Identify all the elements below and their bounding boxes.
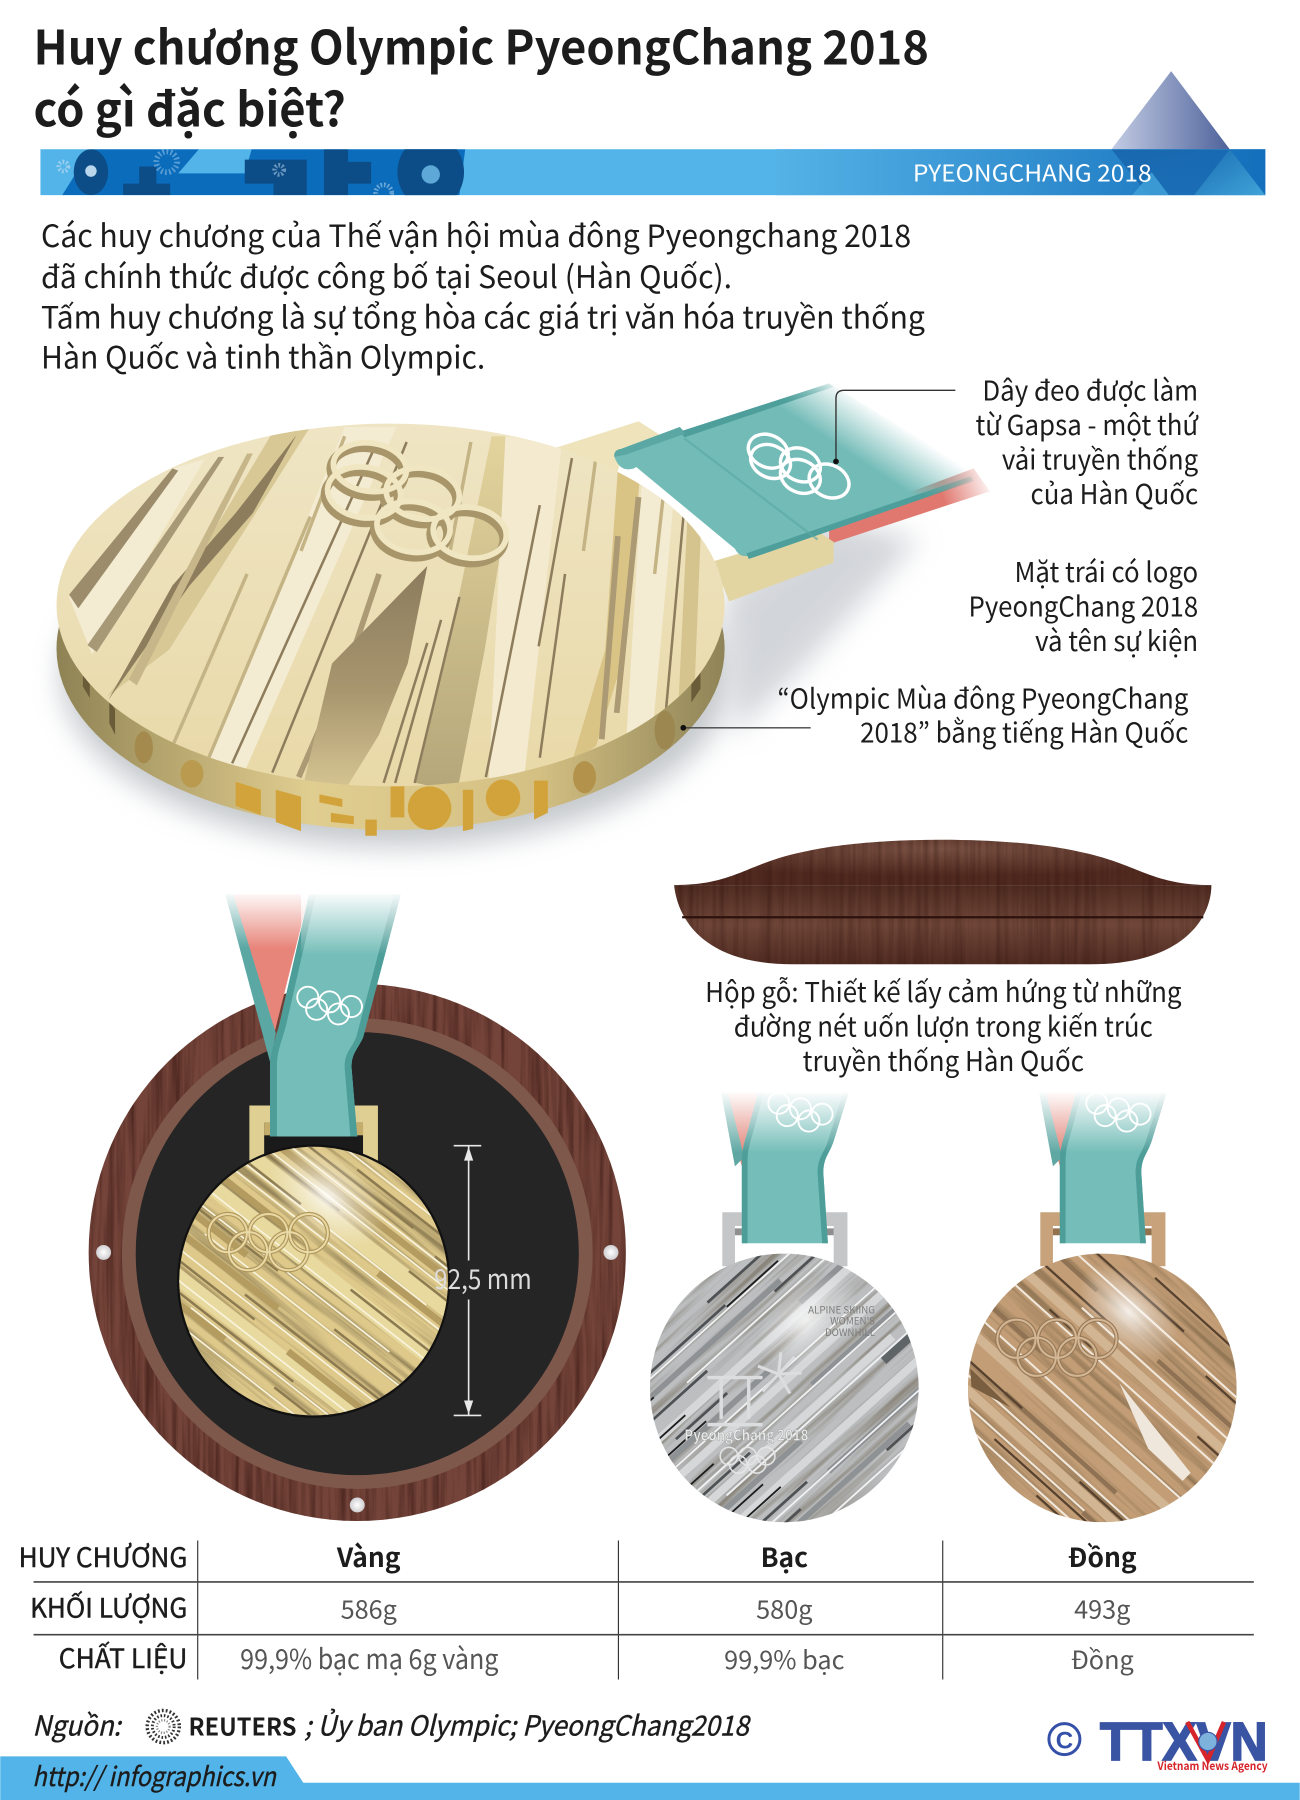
lower loop (713, 530, 834, 602)
callout: obverse: và tên sự kiện (1035, 619, 1198, 659)
wooden box side view (674, 840, 1211, 964)
title (34, 9, 929, 140)
footer bar (0, 1755, 1300, 1800)
row: medal (19, 1536, 1137, 1575)
silver emblem text: WOMEN'S (830, 1314, 875, 1328)
callout: edge lettering: 2018” bằng tiếng Hàn Quốc (860, 711, 1188, 751)
intro text: Tấm huy chương là sự tổng hòa các giá trị văn hóa truyền thống (41, 292, 925, 337)
caption: wooden box: truyền thống Hàn Quốc (803, 1039, 1084, 1079)
row: material (59, 1637, 1134, 1677)
row: weight: 493g (1074, 1591, 1130, 1627)
bronze medal (968, 1094, 1237, 1522)
back ribbon (225, 894, 309, 1050)
silver hanger (722, 1212, 847, 1266)
embossed rings (322, 438, 510, 567)
bronze rings (997, 1320, 1117, 1376)
logo: TTXVN: Vietnam News Agency (1157, 1758, 1268, 1774)
silver disc (650, 1254, 919, 1522)
wooden box with gold medal (88, 894, 626, 1521)
callout: ribbon (833, 369, 1199, 512)
silver emblem text: PyeongChang 2018 (684, 1425, 809, 1446)
icon: mountain triangle (1111, 71, 1230, 149)
red ribbon back (829, 468, 990, 544)
footer bar: http:// infographics.vn (32, 1755, 277, 1794)
callout: ribbon: Dây đeo được làm (982, 369, 1198, 409)
row: weight (30, 1586, 1130, 1627)
banner: PyeongChang 2018 (40, 149, 1266, 196)
callout: edge lettering (680, 676, 1189, 751)
row: material: 99,9% bạc mạ 6g vàng (240, 1637, 499, 1677)
bronze disc (968, 1254, 1237, 1522)
row: medal: Vàng (336, 1536, 401, 1575)
teal ribbon (614, 383, 982, 559)
table (19, 1536, 1254, 1679)
callout: obverse: Mặt trái có logo (1014, 550, 1198, 590)
source: REUTERS (189, 1708, 296, 1743)
callout: ribbon: vải truyền thống (1002, 438, 1199, 478)
3D gold medal with ribbon (57, 383, 990, 847)
source: Nguồn: (32, 1704, 123, 1744)
bronze ribbon (1032, 1091, 1175, 1243)
front ribbon (270, 891, 407, 1136)
silver emblem text: ALPINE SKIING (808, 1302, 875, 1316)
intro text: Các huy chương của Thế vận hội mùa đông Pyeongchang 2018 (41, 211, 911, 256)
silver ribbon (714, 1091, 857, 1243)
callout: edge lettering: “Olympic Mùa đông PyeongChang (777, 676, 1189, 716)
title: Huy chương Olympic PyeongChang 2018 (34, 9, 929, 78)
centre brown wedge (301, 566, 427, 794)
medal edge with Korean lettering (57, 467, 725, 836)
source: ; Ủy ban Olympic; PyeongChang2018 (304, 1704, 751, 1744)
caption: wooden box: Hộp gỗ: Thiết kế lấy cảm hứng từ những (705, 970, 1182, 1010)
callout: ribbon: của Hàn Quốc (1031, 472, 1198, 512)
pins (96, 1245, 618, 1512)
bronze hanger (1040, 1212, 1165, 1266)
intro text (41, 211, 925, 377)
caption: wooden box (705, 970, 1182, 1079)
caption: wooden box: đường nét uốn lượn trong kiến trúc (734, 1005, 1153, 1045)
medal shadow (61, 503, 919, 847)
medal rings (209, 1214, 328, 1270)
row: weight: KHỐI LƯỢNG (30, 1586, 187, 1625)
silver emblem text: DOWNHILL (825, 1325, 875, 1339)
tonal bands (107, 427, 310, 697)
upper loop (556, 421, 664, 482)
source (32, 1704, 751, 1744)
row: weight: 586g (341, 1591, 397, 1627)
wood frame (89, 984, 626, 1521)
callout: ribbon: từ Gapsa - một thứ (975, 403, 1199, 443)
gold medal (177, 1144, 450, 1418)
row: material: CHẤT LIỆU (59, 1637, 187, 1676)
dimension: 92,5 mm: 92,5 mm (434, 1257, 532, 1297)
thin dark lines (108, 435, 296, 700)
logo: TTXVN: C (1056, 1727, 1073, 1754)
intro text: đã chính thức được công bố tại Seoul (Hàn Quốc). (41, 252, 732, 297)
row: material: 99,9% bạc (724, 1641, 845, 1677)
banner: PyeongChang 2018: PYEONGCHANG 2018 (913, 154, 1152, 188)
row: medal: Bạc (761, 1536, 808, 1575)
row: medal: HUY CHƯƠNG (19, 1536, 187, 1575)
medal front face (57, 424, 725, 794)
ribbon rings (743, 428, 855, 504)
intro text: Hàn Quốc và tinh thần Olympic. (41, 332, 485, 377)
silver emblem text (684, 1302, 875, 1473)
gold hanger (249, 1105, 378, 1162)
callout: obverse: PyeongChang 2018 (969, 584, 1198, 624)
silver medal (650, 1094, 919, 1522)
row: medal: Đồng (1068, 1536, 1137, 1575)
logo: TTXVN: TTXVN (1100, 1712, 1268, 1772)
dimension: 92,5 mm (434, 1146, 532, 1415)
row: weight: 580g (756, 1591, 812, 1627)
icon: Reuters dots (147, 1710, 179, 1743)
callout: obverse (969, 550, 1198, 659)
title: có gì đặc biệt? (34, 71, 346, 140)
row: material: Đồng (1071, 1641, 1134, 1677)
